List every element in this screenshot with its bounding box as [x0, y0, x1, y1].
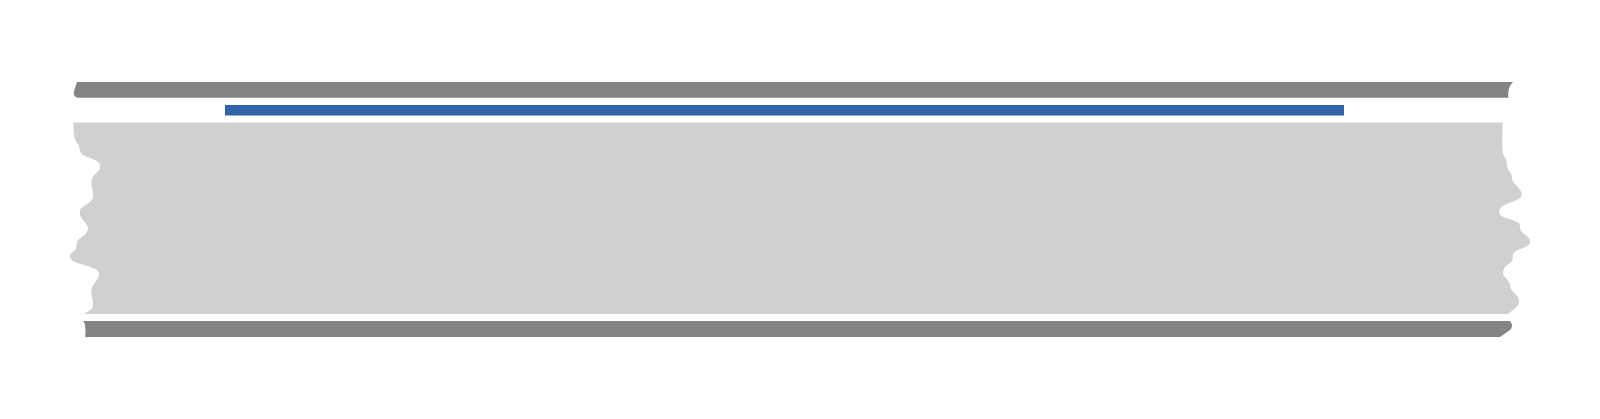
top dark grey bar	[74, 82, 1513, 98]
bottom dark grey bar	[83, 321, 1512, 337]
central light grey panel with torn edges	[70, 122, 1530, 314]
blue title bar	[225, 105, 1344, 116]
